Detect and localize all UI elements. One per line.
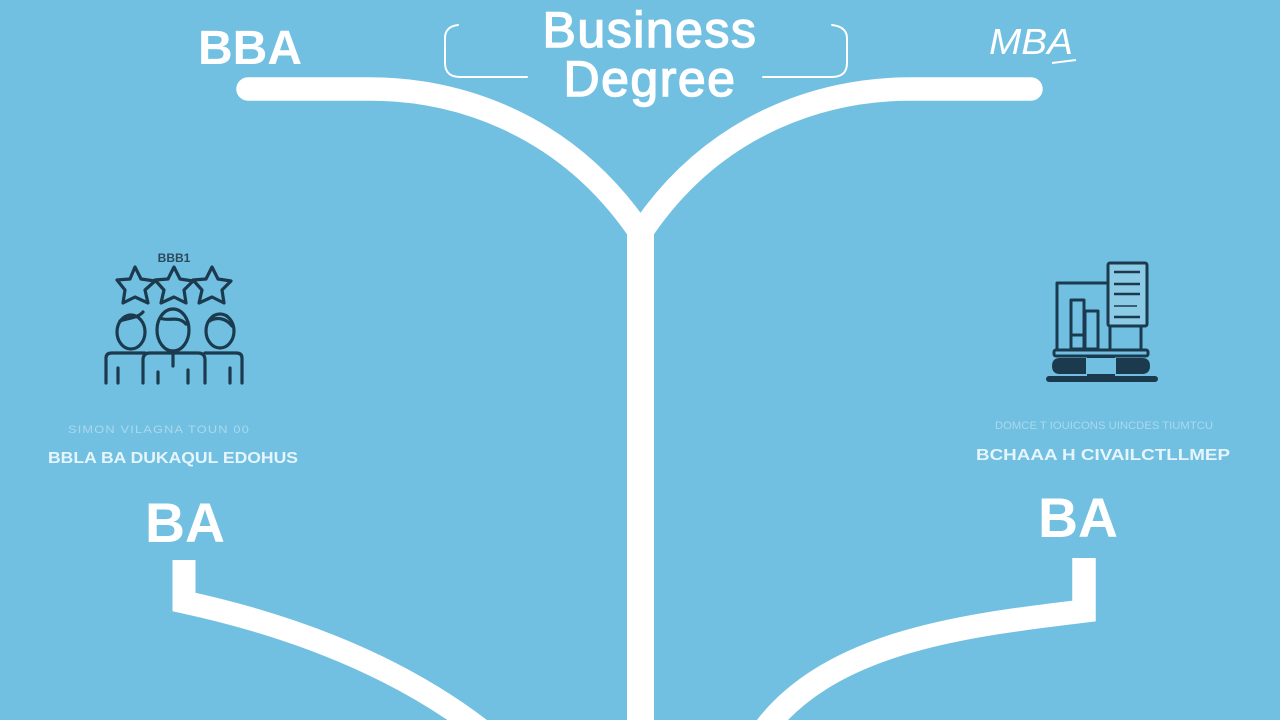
bottom right branch [759,558,1084,720]
three stars [117,267,231,303]
icon: stars and people [106,251,242,383]
title bracket [445,25,847,77]
left small caption: SIMON VILAGNA TOUN 00 [68,424,250,436]
central branching tree connector [184,89,1084,720]
heading: left BA: BA [145,491,225,554]
right small caption: DOMCE T IOUICONS UINCDES TIUMTCU [995,420,1213,432]
heading: right BA: BA [1038,486,1118,549]
heading: BBA: BBA [198,22,302,75]
board [1057,283,1108,349]
top right branch [644,89,1031,228]
title: Degree [564,51,736,107]
left label: BBLA BA DUKAQUL EDOHUS [48,450,298,467]
bottom left branch [184,560,490,720]
left bracket [445,25,527,77]
icon caption: BBB1 [158,251,191,265]
trunk [627,216,654,720]
title [543,2,757,107]
heading: top right scribble: MBA [989,21,1073,62]
title: Business [543,2,757,58]
books [1071,300,1098,349]
base [1046,350,1158,382]
top left branch [248,89,637,228]
icon: books and document on stand [1046,263,1158,382]
right bracket [763,25,847,77]
document [1108,263,1147,349]
three people [106,309,242,383]
right label: BCHAAA H CIVAILCTLLMEP [976,447,1230,464]
